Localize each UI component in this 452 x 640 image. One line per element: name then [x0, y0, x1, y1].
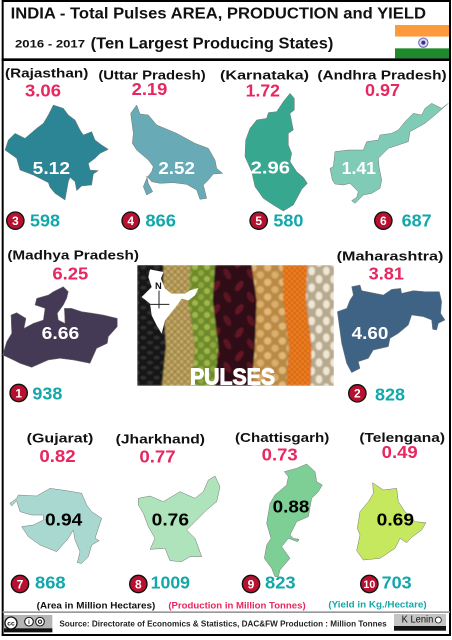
legend: (Area in Million Hectares): [37, 600, 155, 610]
panel: Madhya Pradesh: 6.66: [42, 323, 80, 343]
panel: Maharashtra: 2: [354, 387, 361, 401]
panel: Maharashtra: [337, 249, 445, 405]
panel: Gujarat: 0.82: [39, 446, 76, 466]
panel: Chattisgarh: [235, 430, 329, 593]
panel: Uttar Pradesh: 866: [145, 211, 176, 231]
panel: Gujarat: 0.94: [45, 509, 83, 529]
panel: Rajasthan: 5.12: [33, 158, 70, 178]
panel: Karnataka: 580: [273, 211, 303, 231]
legend: [37, 600, 427, 610]
panel: Andhra Pradesh: 6: [380, 214, 387, 228]
panel: Karnataka: (Karnataka): [220, 67, 309, 82]
panel: Rajasthan: (Rajasthan): [5, 66, 88, 81]
author badge: [394, 614, 446, 631]
panel: Chattisgarh: 9: [248, 577, 255, 591]
panel: Karnataka: [220, 67, 309, 231]
panel: Telengana: 10: [363, 579, 375, 591]
legend: (Production in Million Tonnes): [168, 600, 306, 610]
panel: Chattisgarh: 0.88: [273, 497, 310, 517]
panel: Uttar Pradesh: [98, 67, 223, 231]
panel: Maharashtra: 3.81: [369, 263, 404, 283]
panel: Rajasthan: 598: [30, 211, 60, 231]
panel: Madhya Pradesh: (Madhya Pradesh): [7, 247, 139, 262]
panel: Telengana: [357, 430, 445, 593]
icon: creative commons badge: [4, 615, 52, 632]
panel: Andhra Pradesh: 687: [402, 211, 432, 231]
icon: India map with compass: N: [155, 281, 162, 291]
panel: Jharkhand: 0.77: [139, 447, 176, 467]
panel: Madhya Pradesh: [3, 247, 139, 403]
subtitle: 2016 - 2017: [15, 39, 85, 51]
panel: Rajasthan: 3.06: [25, 81, 61, 101]
panel: Jharkhand: 0.76: [152, 509, 189, 529]
panel: Gujarat: (Gujarat): [27, 430, 93, 445]
icon: Indian flag: [395, 25, 449, 58]
panel: Chattisgarh: 0.73: [262, 445, 298, 465]
panel: Andhra Pradesh: [317, 67, 448, 231]
header: [11, 6, 449, 58]
panel: Andhra Pradesh: (Andhra Pradesh): [317, 67, 447, 82]
panel: Maharashtra: 4.60: [352, 323, 388, 343]
label: PULSES: PULSES: [190, 364, 275, 390]
panel: Madhya Pradesh: 938: [32, 383, 63, 403]
panel: Jharkhand: 1009: [151, 573, 190, 593]
panel: Karnataka: 5: [255, 214, 262, 228]
panel: Chattisgarh: 823: [265, 573, 296, 593]
icon: creative commons badge: cc: [7, 621, 15, 628]
panel: Madhya Pradesh: 6.25: [52, 263, 89, 283]
panel: Rajasthan: [5, 66, 108, 231]
panel: Karnataka: 2.96: [251, 157, 290, 177]
panel: Jharkhand: [116, 431, 220, 593]
panel: Jharkhand: 8: [135, 577, 142, 591]
image: pulses collage: [137, 265, 334, 390]
footer: [3, 611, 450, 632]
panel: Telengana: 0.69: [377, 509, 414, 529]
legend: (Yield in Kg./Hectare): [328, 600, 427, 610]
author badge: K Lenin: [402, 615, 433, 626]
panel: Gujarat: [10, 430, 102, 593]
panel: Telengana: 0.49: [382, 442, 418, 462]
source text: Source: Directorate of Economics & Statistics, DAC&FW Production : Million Tonnes: [59, 619, 387, 629]
panel: Maharashtra: 828: [375, 385, 405, 405]
panel: Uttar Pradesh: 2.52: [158, 158, 195, 178]
panel: Maharashtra: (Maharashtra): [337, 249, 443, 264]
panel: Andhra Pradesh: 1.41: [342, 158, 376, 178]
panel: Uttar Pradesh: (Uttar Pradesh): [98, 67, 206, 82]
panel: Uttar Pradesh: 2.19: [132, 79, 167, 99]
panel: Chattisgarh: (Chattisgarh): [235, 430, 329, 445]
panel: Rajasthan: 3: [12, 214, 19, 228]
panel: Uttar Pradesh: 4: [127, 214, 134, 228]
title: INDIA - Total Pulses AREA, PRODUCTION and YIELD: [11, 6, 426, 23]
panel: Gujarat: 7: [17, 577, 24, 591]
icon: India map with compass: [142, 269, 198, 334]
panel: Telengana: 703: [382, 573, 412, 593]
panel: Jharkhand: (Jharkhand): [116, 431, 205, 446]
icon: creative commons badge: i: [28, 620, 30, 626]
panel: Gujarat: 868: [35, 573, 66, 593]
panel: Andhra Pradesh: 0.97: [365, 80, 400, 100]
subtitle: (Ten Largest Producing States): [91, 35, 333, 52]
panel: Telengana: (Telengana): [359, 430, 445, 445]
panel: Madhya Pradesh: 1: [15, 386, 22, 400]
panel: Karnataka: 1.72: [246, 81, 280, 101]
